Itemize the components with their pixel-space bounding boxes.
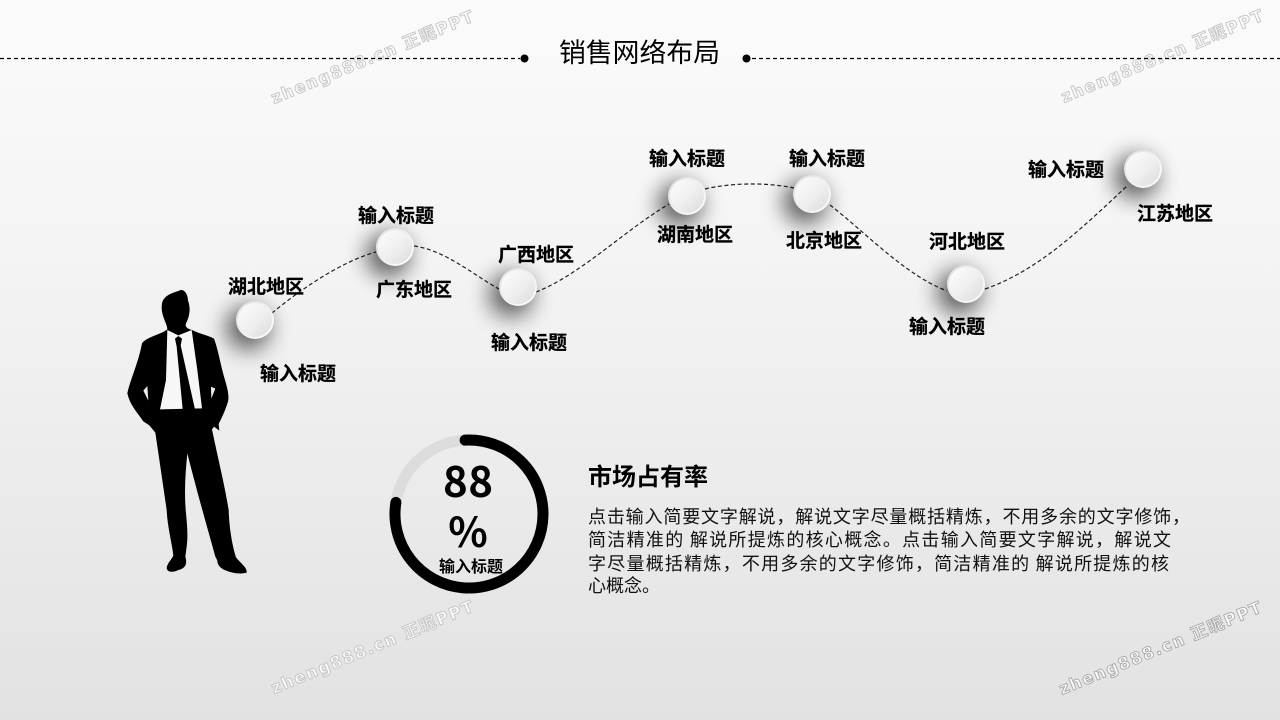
watermark top left: zheng888.cn 正昵PPT — [268, 7, 477, 108]
title: 销售网络布局 — [559, 31, 720, 70]
title rule — [0, 54, 1280, 62]
watermark top right: zheng888.cn 正昵PPT — [1058, 6, 1267, 107]
icon: businessman silhouette — [127, 290, 247, 573]
ring caption: 输入标题 — [439, 553, 503, 577]
label: 河北地区: 河北地区 — [929, 227, 1005, 254]
label: 广西地区: 广西地区 — [498, 240, 574, 267]
watermark bottom right: zheng888.cn 正昵PPT — [1056, 598, 1265, 699]
node: 江苏 — [1114, 150, 1162, 199]
dashed route line — [272, 184, 1127, 313]
node: 广东 — [366, 228, 414, 277]
tie — [175, 336, 195, 409]
label: 输入标题 2: 输入标题 — [358, 201, 434, 228]
label: 输入标题 3: 输入标题 — [491, 328, 567, 355]
ring value: 88: 88 — [443, 449, 493, 510]
label: 北京地区: 北京地区 — [786, 226, 862, 253]
node: 湖南 — [658, 177, 706, 226]
arm gaps — [143, 386, 215, 401]
label: 广东地区: 广东地区 — [376, 275, 452, 302]
chart: 88% progress ring — [395, 440, 543, 588]
label: 输入标题 6: 输入标题 — [909, 312, 985, 339]
ring value: percent: % — [448, 499, 488, 559]
label: 湖南地区: 湖南地区 — [657, 220, 733, 247]
label: 输入标题 1: 输入标题 — [260, 359, 336, 386]
text block: description: 心概念。 — [588, 572, 660, 598]
label: 输入标题 4: 输入标题 — [649, 144, 725, 171]
text block: description: 简洁精准的 解说所提炼的核心概念。点击输入简要文字解说，解说文 — [588, 526, 1171, 552]
label: 输入标题 5: 输入标题 — [789, 144, 865, 171]
label: 江苏地区: 江苏地区 — [1137, 199, 1213, 226]
node: 湖北 — [226, 301, 274, 350]
text block: description: 点击输入简要文字解说，解说文字尽量概括精炼，不用多余的文字修饰， — [588, 503, 1190, 529]
label: 湖北地区: 湖北地区 — [228, 272, 304, 299]
text block: description: 字尽量概括精炼，不用多余的文字修饰，简洁精准的 解说所提炼的核 — [588, 550, 1169, 576]
shirt — [160, 330, 202, 409]
node: 河北 — [937, 265, 985, 314]
text block: description — [588, 503, 1190, 598]
heading: 市场占有率: 市场占有率 — [588, 457, 708, 492]
node: 北京 — [783, 175, 831, 224]
node: 广西 — [489, 268, 537, 317]
label: 输入标题 7: 输入标题 — [1028, 155, 1104, 182]
watermark bottom left: zheng888.cn 正昵PPT — [268, 597, 477, 698]
